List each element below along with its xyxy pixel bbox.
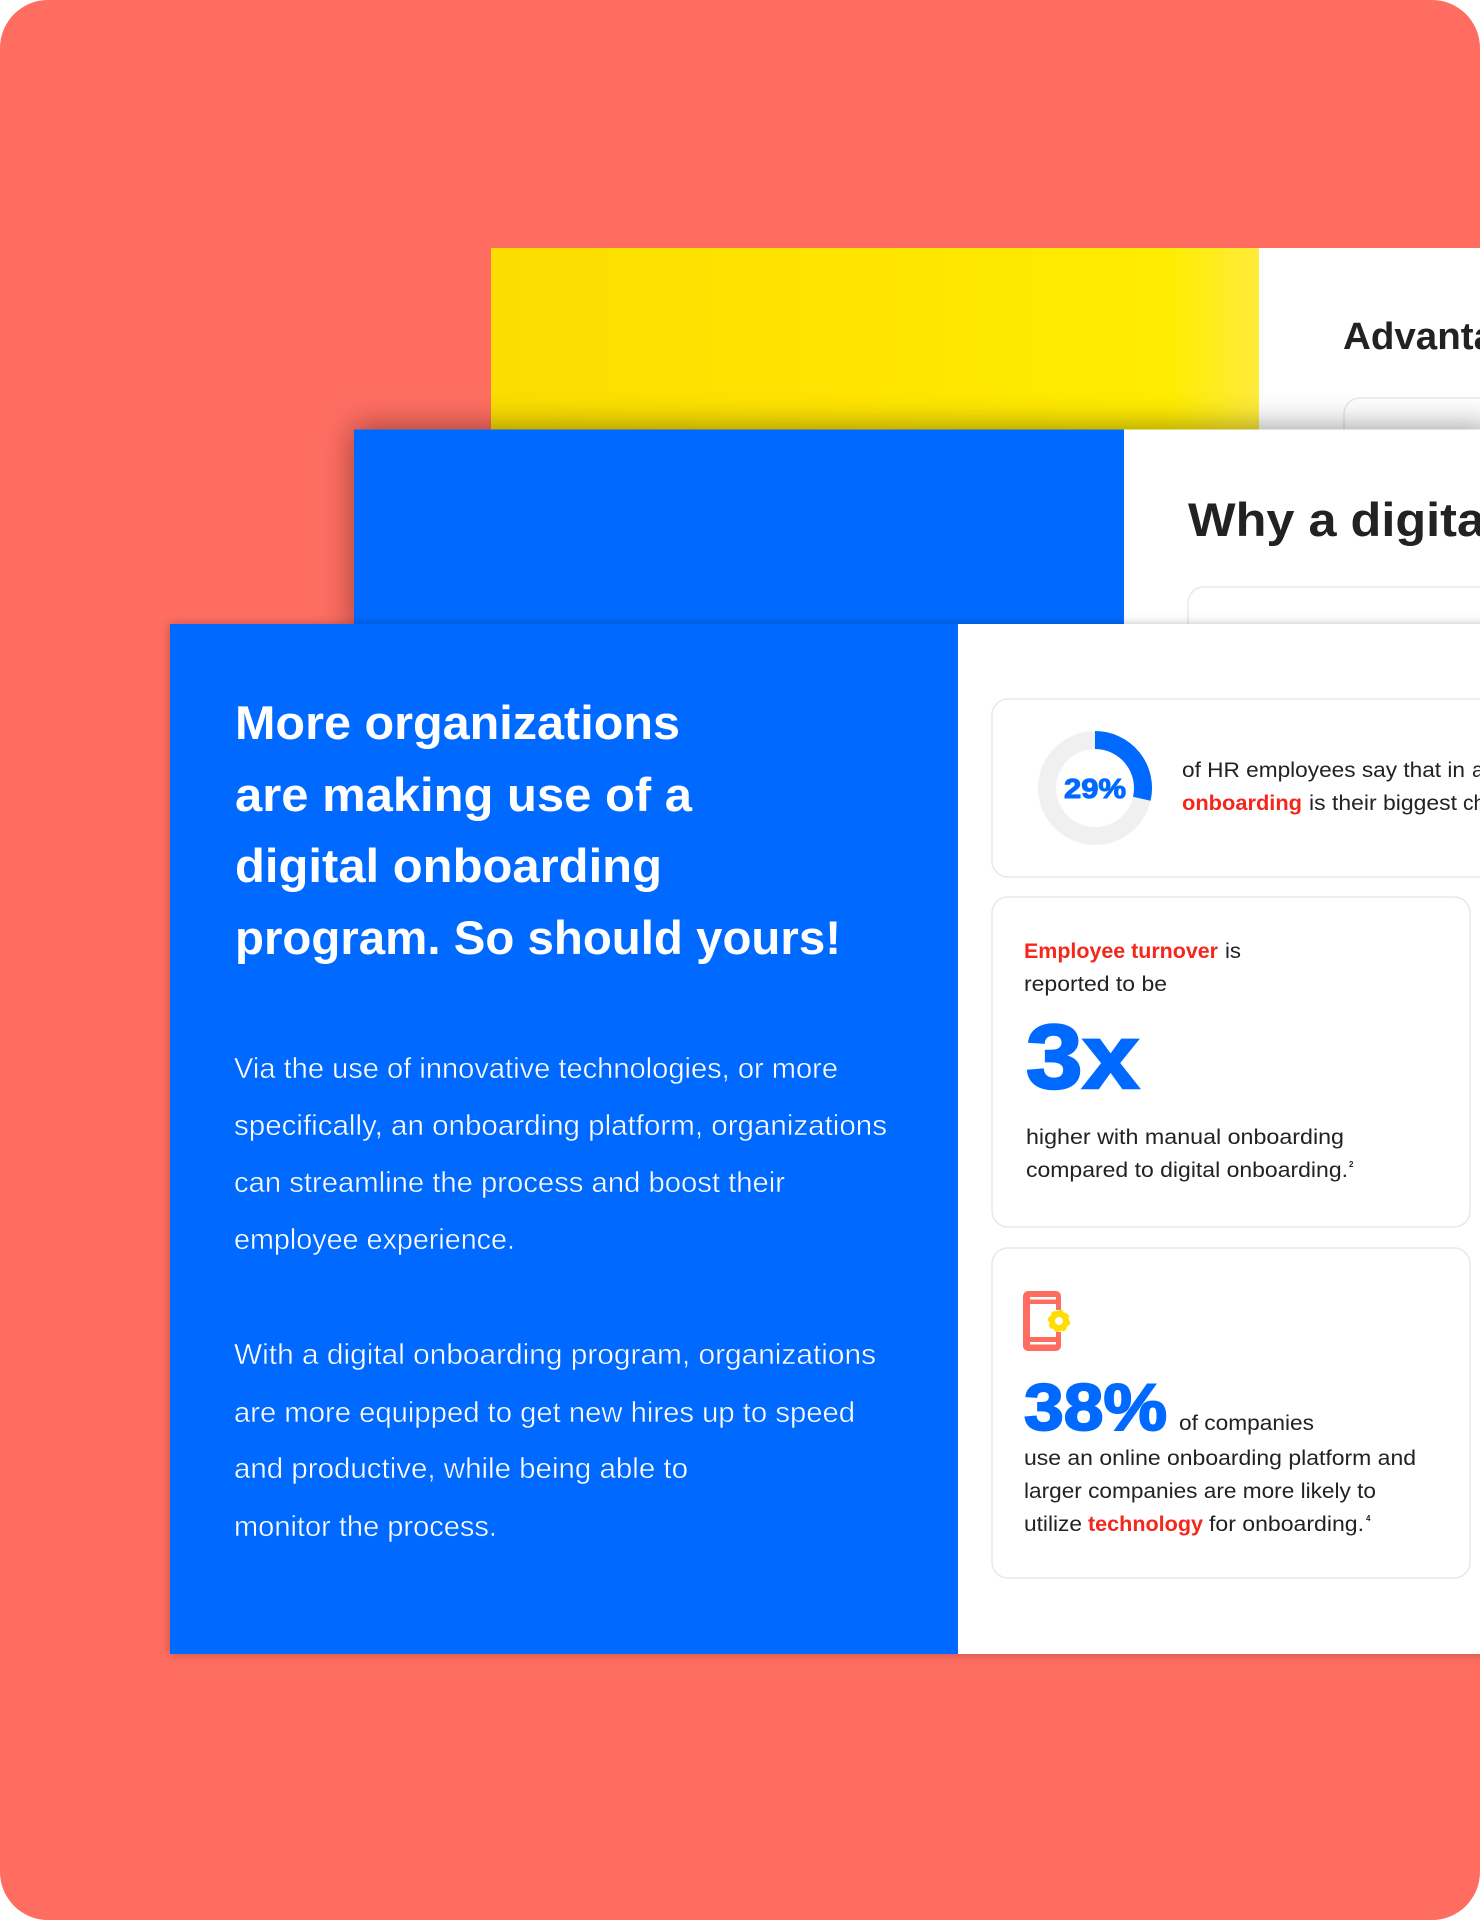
card: 29 percent of HR employees (992, 699, 1480, 877)
stat: 38%: 38% (1024, 1370, 1167, 1444)
text: online onboarding platform: for onboarding. (1209, 1513, 1364, 1536)
text: online onboarding platform (1024, 1412, 1416, 1536)
text: manual vs digital: 2 (1349, 1160, 1354, 1169)
text: online onboarding platform: of companies (1179, 1412, 1314, 1435)
card: middle slide card top (1188, 587, 1480, 647)
card: 38 percent of companies (992, 1248, 1470, 1578)
text: employee turnover: Employee turnover (1024, 940, 1218, 963)
text: online onboarding platform: use an online onboarding platform and (1024, 1447, 1416, 1470)
text: manual vs digital (1026, 1126, 1354, 1182)
text: online onboarding platform: 4 (1366, 1514, 1371, 1523)
panel: front slide (170, 624, 1480, 1654)
text: HR employees statement: is their biggest (1309, 792, 1457, 815)
text block: paragraph two: With a digital onboarding program, organizations (234, 1339, 876, 1371)
heading: more organizations: More organizations (235, 696, 680, 749)
text block: paragraph one: employee experience. (234, 1224, 515, 1256)
text block: paragraph two (234, 1339, 876, 1543)
text: employee turnover (1024, 940, 1241, 996)
heading: more organizations: program. So should yours! (235, 911, 841, 964)
text: manual vs digital: higher with manual onboarding (1026, 1126, 1344, 1149)
text block: paragraph one: can streamline the process and boost their (234, 1167, 785, 1199)
text: online onboarding platform: larger companies are more likely to (1024, 1480, 1376, 1503)
stat: 3x: 3x (1026, 1007, 1139, 1108)
heading: why a digital: Why a digita (1188, 493, 1480, 546)
card: employee turnover 3x (992, 897, 1470, 1227)
heading: more organizations: digital onboarding (235, 839, 662, 892)
heading: more organizations (235, 696, 841, 964)
text block: paragraph two: monitor the process. (234, 1511, 497, 1543)
text: employee turnover: is (1225, 940, 1241, 963)
text: online onboarding platform: utilize (1024, 1513, 1082, 1536)
text: HR employees statement: of HR employees say that in (1182, 759, 1465, 782)
text: online onboarding platform: technology (1088, 1513, 1203, 1536)
panel: middle blue slide (354, 430, 1480, 640)
donut chart: 29%: 29% (1064, 773, 1126, 804)
text block: paragraph two: and productive, while being able to (234, 1453, 688, 1485)
icon: phone with gear (1023, 1291, 1068, 1351)
text: employee turnover: reported to be (1024, 973, 1167, 996)
text block: paragraph one: specifically, an onboarding platform, organizations (234, 1110, 887, 1142)
donut chart: 29% (1047, 740, 1143, 836)
text block: paragraph two: are more equipped to get new hires up to speed (234, 1397, 855, 1429)
text: HR employees statement: onboarding (1182, 792, 1302, 815)
text: HR employees statement (1182, 759, 1480, 815)
text block: paragraph one (234, 1053, 887, 1256)
panel: back yellow slide (491, 248, 1480, 458)
text: manual vs digital: compared to digital onboarding. (1026, 1159, 1348, 1182)
text block: paragraph one: Via the use of innovative technologies, or more (234, 1053, 838, 1085)
heading: more organizations: are making use of a (235, 768, 693, 821)
